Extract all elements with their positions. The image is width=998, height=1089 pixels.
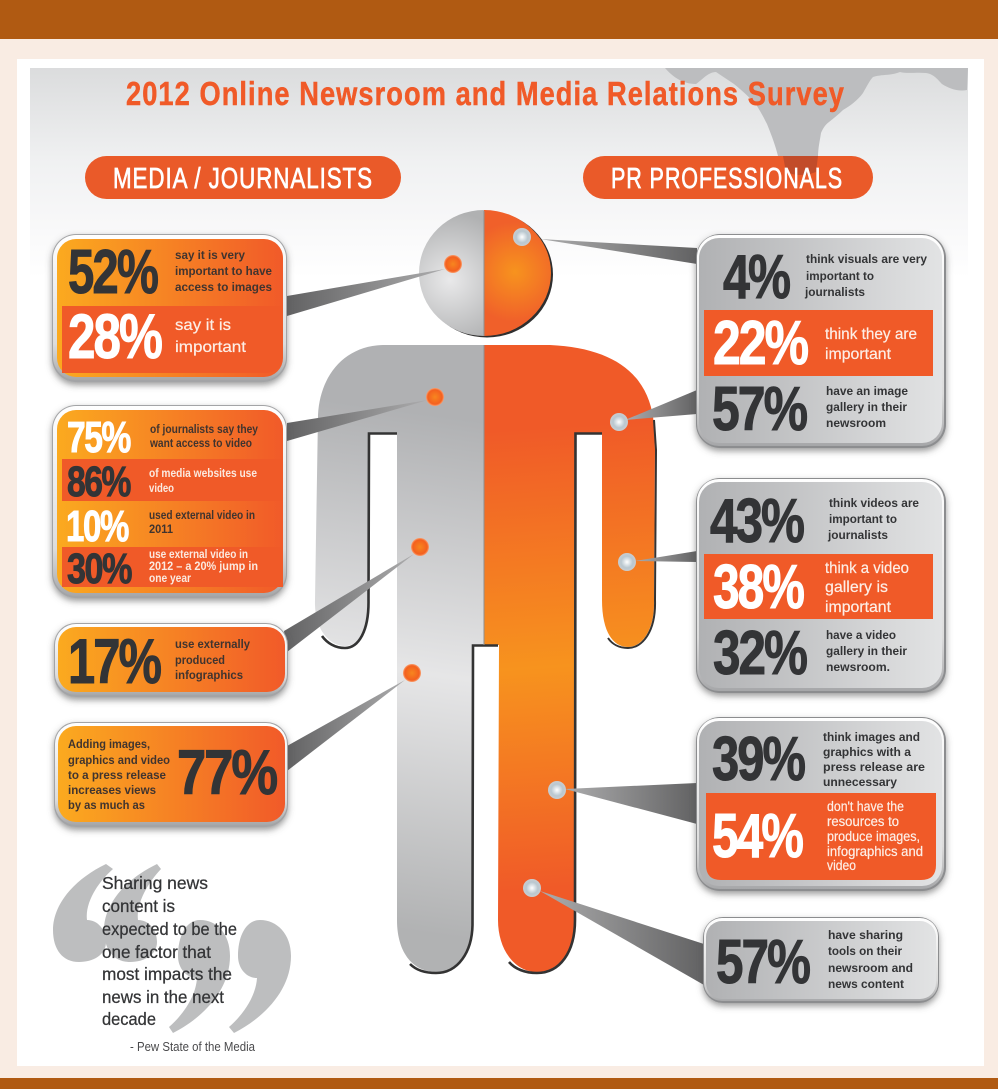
text: 32% description <box>826 628 907 674</box>
text: press release description <box>68 737 170 812</box>
text: 39% description: think images and <box>823 730 920 744</box>
quote text: content is <box>102 896 175 916</box>
text: 54% description: infographics and <box>827 844 923 859</box>
pin: chest left <box>426 388 444 406</box>
text: 32% description: newsroom. <box>826 660 890 674</box>
text: 38% description: important <box>825 599 892 616</box>
text: 28% description <box>175 317 247 356</box>
text: 54% description: video <box>827 858 856 873</box>
panel: images, journalists <box>52 234 287 382</box>
pill: media / journalists: MEDIA / JOURNALISTS <box>113 163 373 195</box>
quote attribution: - Pew State of the Media <box>130 1040 255 1054</box>
stat: 32%: 32% <box>713 619 807 688</box>
text: press release description: increases views <box>68 783 156 797</box>
text: 38% description <box>825 560 909 616</box>
stat: 39%: 39% <box>712 725 805 794</box>
text: 30% description <box>149 549 258 585</box>
text: 86% description: video <box>149 483 174 495</box>
text: 39% description: press release are <box>823 760 925 774</box>
text: 30% description: one year <box>149 573 191 585</box>
text: 54% description: don't have the <box>827 799 904 814</box>
text: 57% description <box>828 928 913 991</box>
text: 10% description <box>149 508 255 536</box>
text: 38% description: gallery is <box>825 579 888 596</box>
text: press release description: by as much as <box>68 798 145 812</box>
stat: 52%: 52% <box>68 238 158 307</box>
text: 22% description <box>825 326 917 363</box>
pin: head right <box>513 228 531 246</box>
human figure <box>315 210 656 973</box>
text: 38% description: think a video <box>825 560 909 577</box>
stat: 30%: 30% <box>67 545 132 593</box>
text: 52% description: say it is very <box>175 248 245 262</box>
text: 75% description: want access to video <box>149 436 252 450</box>
world map silhouette <box>665 68 968 172</box>
head <box>419 210 553 338</box>
text: 4% description: important to <box>806 269 874 283</box>
pin: thigh right <box>548 781 566 799</box>
connector: video left <box>287 400 428 441</box>
text: 39% description <box>823 730 925 789</box>
panel: visuals, PR <box>696 234 946 448</box>
text: 75% description: of journalists say they <box>150 422 258 436</box>
text: 52% description <box>175 248 272 294</box>
text: press release description: graphics and video <box>68 753 170 767</box>
stat: 57%: 57% <box>712 375 807 444</box>
pin: torso left <box>411 538 429 556</box>
text: 30% description: use external video in <box>149 549 248 561</box>
stat: 77%: 77% <box>177 738 277 808</box>
connector: press release left <box>287 680 405 771</box>
stat: 54%: 54% <box>712 802 803 871</box>
text: press release description: to a press release <box>68 768 166 782</box>
pill: media / journalists <box>85 156 401 199</box>
text: 57% description: have sharing <box>828 928 903 942</box>
text: 43% description <box>827 496 919 542</box>
text: 57% description: news content <box>828 977 904 991</box>
panel: press release, PR <box>696 717 946 891</box>
icon: closing quote marks <box>169 920 291 1033</box>
stat: 38%: 38% <box>713 553 804 622</box>
text: 10% description: used external video in <box>149 508 255 522</box>
stat: 4%: 4% <box>723 243 790 312</box>
pin: arm right <box>618 553 636 571</box>
text: 39% description: unnecessary <box>823 775 897 789</box>
text: 30% description: 2012 – a 20% jump in <box>149 561 258 573</box>
stat: 17%: 17% <box>68 627 161 697</box>
text: 43% description: journalists <box>827 528 888 542</box>
text: 32% description: gallery in their <box>826 644 907 658</box>
text: 57% description <box>826 384 908 430</box>
text: 43% description: think videos are <box>829 496 919 510</box>
pill: PR professionals <box>583 156 873 199</box>
icon: opening quote marks <box>53 864 161 962</box>
text: 54% description <box>827 799 923 873</box>
center divider <box>483 211 485 645</box>
text: 75% description <box>149 422 258 450</box>
text: 86% description <box>149 468 257 495</box>
pin: head left <box>444 255 462 273</box>
panel: sharing tools, PR <box>703 917 939 1003</box>
body: gray half <box>315 345 484 972</box>
connector: visuals right <box>540 239 697 264</box>
quote text: news in the next <box>102 987 224 1007</box>
text: 57% description: newsroom and <box>828 961 913 975</box>
panel: video, PR <box>696 478 946 693</box>
pill: PR professionals: PR PROFESSIONALS <box>611 163 843 195</box>
stat: 86%: 86% <box>67 458 131 506</box>
quote text: expected to be the <box>102 919 237 939</box>
text: 10% description: 2011 <box>149 522 173 536</box>
text: 17% description: produced <box>175 653 225 667</box>
text: 4% description: journalists <box>804 285 865 299</box>
text: 17% description <box>175 637 250 682</box>
bottom bar <box>0 1078 998 1089</box>
quote text: most impacts the <box>102 964 232 984</box>
stat: 10%: 10% <box>66 502 129 551</box>
text: press release description: Adding images, <box>68 737 150 751</box>
gray header gradient <box>30 68 968 278</box>
text: 4% description: think visuals are very <box>806 252 927 266</box>
connector: infographics left <box>284 554 414 652</box>
panel: video, journalists <box>52 405 287 598</box>
text: 17% description: infographics <box>175 668 243 682</box>
stat: 28%: 28% <box>68 302 162 372</box>
panel: press release <box>54 722 288 827</box>
text: 22% description: important <box>825 346 892 363</box>
text: 22% description: think they are <box>825 326 917 343</box>
text: 43% description: important to <box>829 512 897 526</box>
connector: resources right <box>565 783 697 824</box>
text: 52% description: access to images <box>175 280 272 294</box>
text: 54% description: produce images, <box>827 829 920 844</box>
text: 86% description: of media websites use <box>149 468 257 480</box>
stat: 22%: 22% <box>713 309 808 378</box>
top bar <box>0 0 998 39</box>
pin: shoulder right <box>610 413 628 431</box>
text: 57% description: tools on their <box>828 944 902 958</box>
text: 57% description: newsroom <box>826 416 886 430</box>
connector: sharing right <box>540 891 704 985</box>
text: 57% description: have an image <box>826 384 908 398</box>
text: 28% description: important <box>175 339 247 356</box>
text: 32% description: have a video <box>826 628 896 642</box>
stat: 43%: 43% <box>710 487 804 556</box>
pin: shin right <box>523 879 541 897</box>
panel: infographics <box>54 623 288 697</box>
text: 57% description: gallery in their <box>826 400 907 414</box>
body outline shadows <box>322 420 656 973</box>
connector: video right <box>635 551 697 562</box>
text: 28% description: say it is <box>175 317 231 334</box>
text: 52% description: important to have <box>175 264 272 278</box>
quote text <box>102 873 237 1029</box>
quote text: one factor that <box>102 942 211 962</box>
pin: leg left <box>403 664 421 682</box>
stat: 75%: 75% <box>67 413 131 462</box>
text: 17% description: use externally <box>175 637 250 651</box>
text: 4% description <box>804 252 927 299</box>
text: 54% description: resources to <box>827 814 899 829</box>
quote text: Sharing news <box>102 873 208 893</box>
title: 2012 Online Newsroom and Media Relations Survey <box>126 75 845 112</box>
connector: gallery right <box>625 390 697 420</box>
body: orange half <box>484 345 655 972</box>
stat: 57%: 57% <box>716 928 810 997</box>
text: 39% description: graphics with a <box>823 745 911 759</box>
connector: images left <box>287 269 445 316</box>
quote text: decade <box>102 1009 156 1029</box>
